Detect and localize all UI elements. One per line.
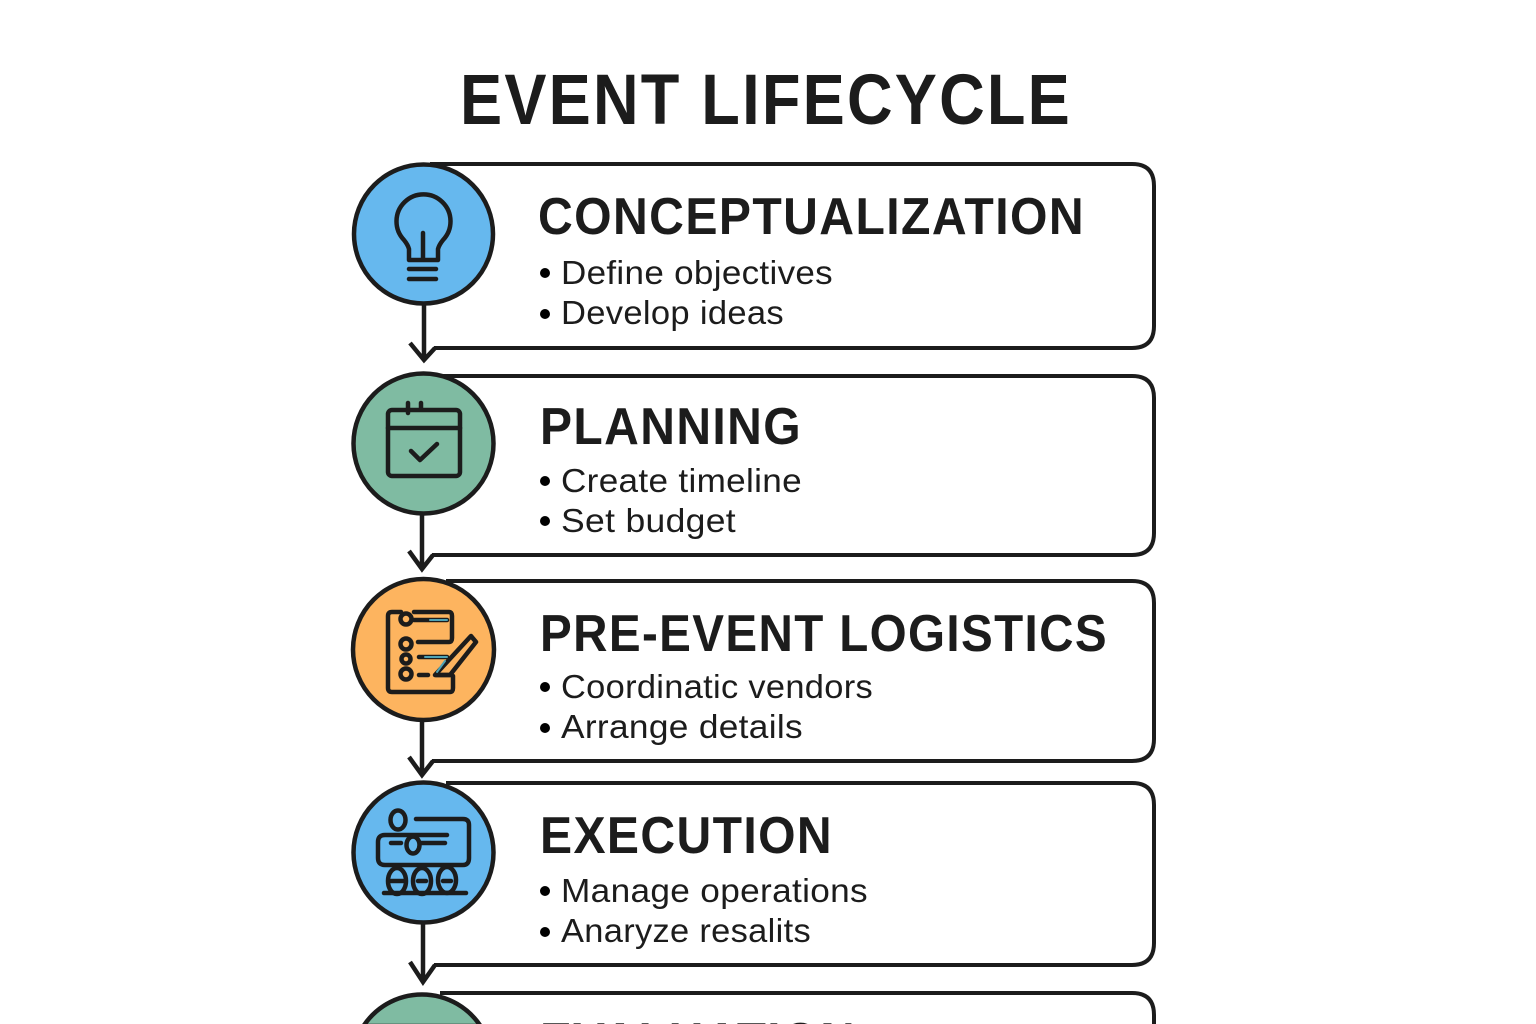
circle 2 [354,374,494,514]
icon: checklist [388,612,476,692]
bullets: planning: Create timeline [561,462,802,499]
bullets: execution: Anaryze resalits [561,912,811,949]
panel: pre-event logistics [353,579,1154,775]
circle 1 [354,164,493,304]
panel: execution [354,782,1154,982]
bullets: conceptualization [540,254,833,331]
panel: evaluation [364,993,1154,1024]
arrow 2 [409,512,433,569]
bullets: execution [540,872,868,949]
panel: conceptualization [354,164,1154,360]
bullets: planning: Set budget [561,502,736,539]
bullets: conceptualization: Define objectives [561,254,833,291]
circle 3 [353,579,494,720]
card outline 4 [434,783,1154,965]
bullets: conceptualization: Develop ideas [561,294,784,331]
bullets: execution: Manage operations [561,872,868,909]
card outline 1 [430,164,1154,348]
icon: calendar [388,403,460,476]
card outline 5 [440,993,1154,1024]
heading: planning: PLANNING [540,398,802,456]
bullets: pre-event logistics [540,668,873,745]
arrow 3 [409,720,433,775]
arrow 1 [410,304,435,360]
bullets: planning [540,462,802,539]
card outline 3 [432,581,1154,761]
heading: pre-event logistics: PRE-EVENT LOGISTICS [540,605,1108,663]
icon: light bulb [396,194,451,279]
title: EVENT LIFECYCLE [460,61,1072,140]
bullets: pre-event logistics: Arrange details [561,708,803,745]
icon: operations [378,810,469,894]
panel: planning [354,374,1154,569]
arrow 4 [410,924,435,982]
card outline 2 [432,376,1154,555]
circle 5 [364,994,480,1024]
heading: conceptualization: CONCEPTUALIZATION [538,188,1085,246]
bullets: pre-event logistics: Coordinatic vendors [561,668,873,705]
circle 4 [354,782,494,922]
heading: execution: EXECUTION [540,807,833,865]
